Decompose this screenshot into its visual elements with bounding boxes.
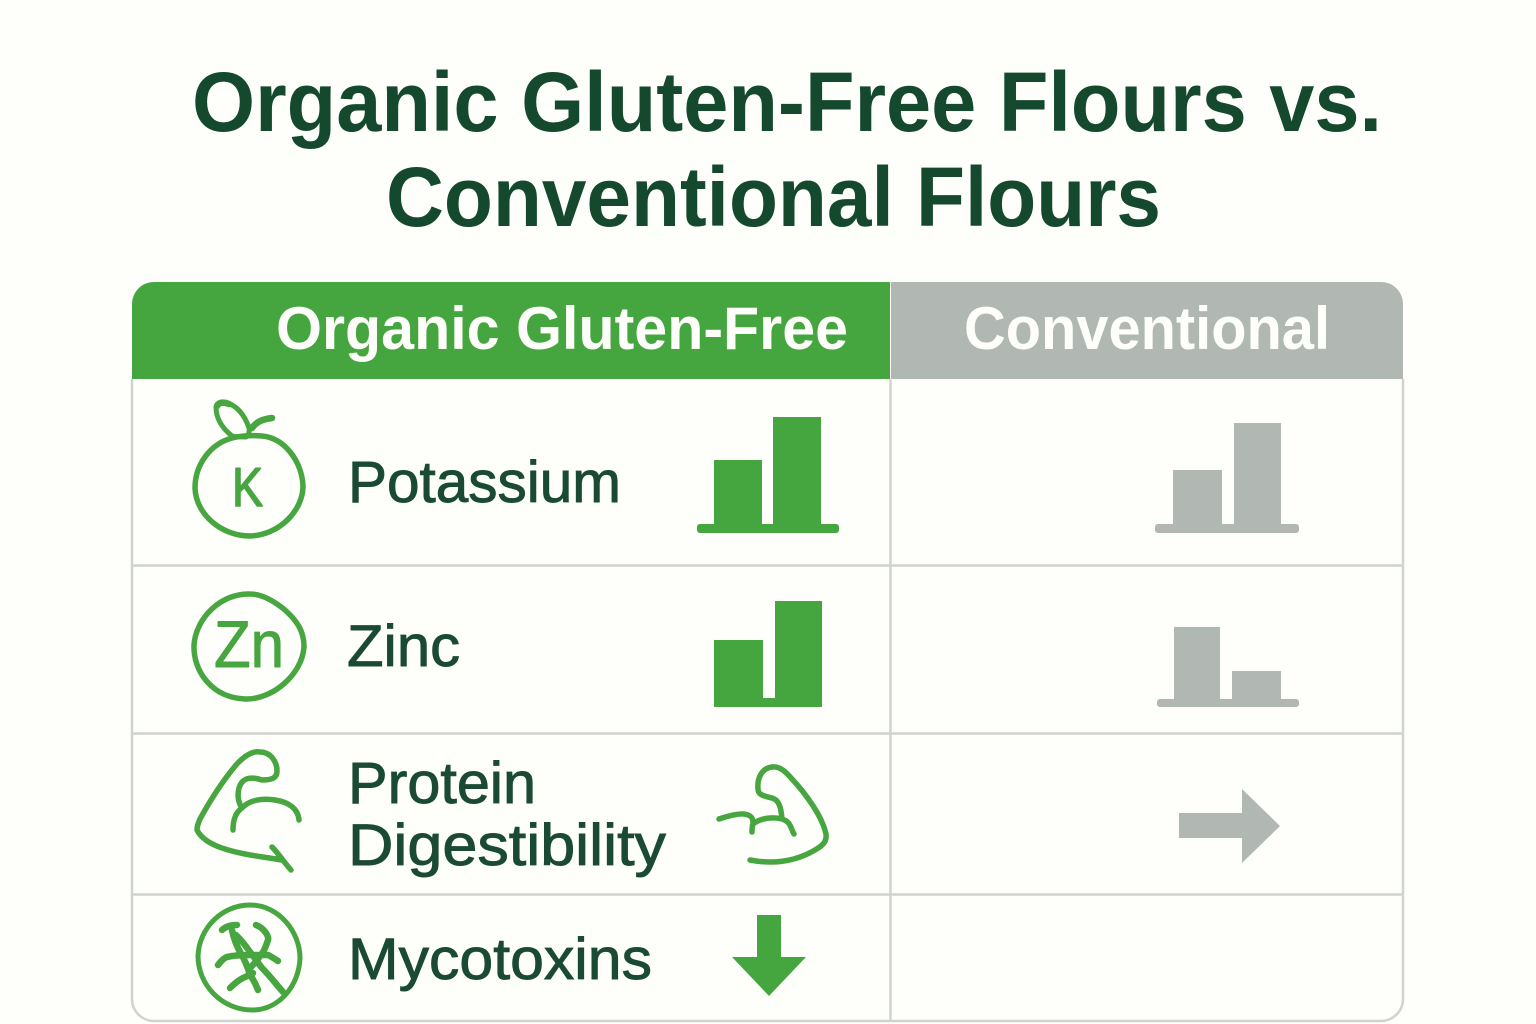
arrow: organic lower	[732, 915, 806, 996]
header: conventional: Conventional	[964, 295, 1330, 362]
arrow: conventional neutral	[1179, 789, 1280, 863]
bar chart: organic potassium	[697, 417, 839, 533]
icon: mycotoxins	[198, 905, 300, 1010]
title: Organic Gluten-Free Flours vs.	[192, 55, 1382, 149]
header: organic gluten-free	[132, 282, 890, 379]
icon: zinc	[194, 594, 304, 699]
header: conventional	[891, 282, 1403, 379]
icon: zinc: Zn	[214, 607, 284, 681]
comparison table	[132, 282, 1403, 1021]
header: organic gluten-free: Organic Gluten-Free	[276, 295, 848, 362]
label: protein digestibility	[348, 751, 666, 878]
icon: flexed arm right	[719, 767, 826, 862]
label: zinc: Zinc	[347, 614, 460, 679]
label: protein digestibility: Protein	[348, 751, 536, 816]
label: potassium: Potassium	[348, 450, 621, 515]
label: protein digestibility: Digestibility	[348, 813, 666, 878]
row: potassium	[195, 402, 1299, 536]
title	[192, 55, 1382, 244]
title: Conventional Flours	[386, 150, 1161, 244]
bar chart: conventional zinc	[1157, 627, 1299, 707]
row: mycotoxins	[198, 905, 806, 1010]
icon: flexed arm left	[197, 752, 299, 870]
bar chart: conventional potassium	[1155, 423, 1299, 533]
icon: potassium apple	[195, 402, 303, 536]
label: mycotoxins: Mycotoxins	[348, 927, 652, 992]
row: protein digestibility	[197, 751, 1280, 878]
icon: potassium apple: K	[232, 456, 263, 518]
bar chart: organic zinc	[714, 601, 822, 707]
row: zinc	[194, 594, 1299, 707]
